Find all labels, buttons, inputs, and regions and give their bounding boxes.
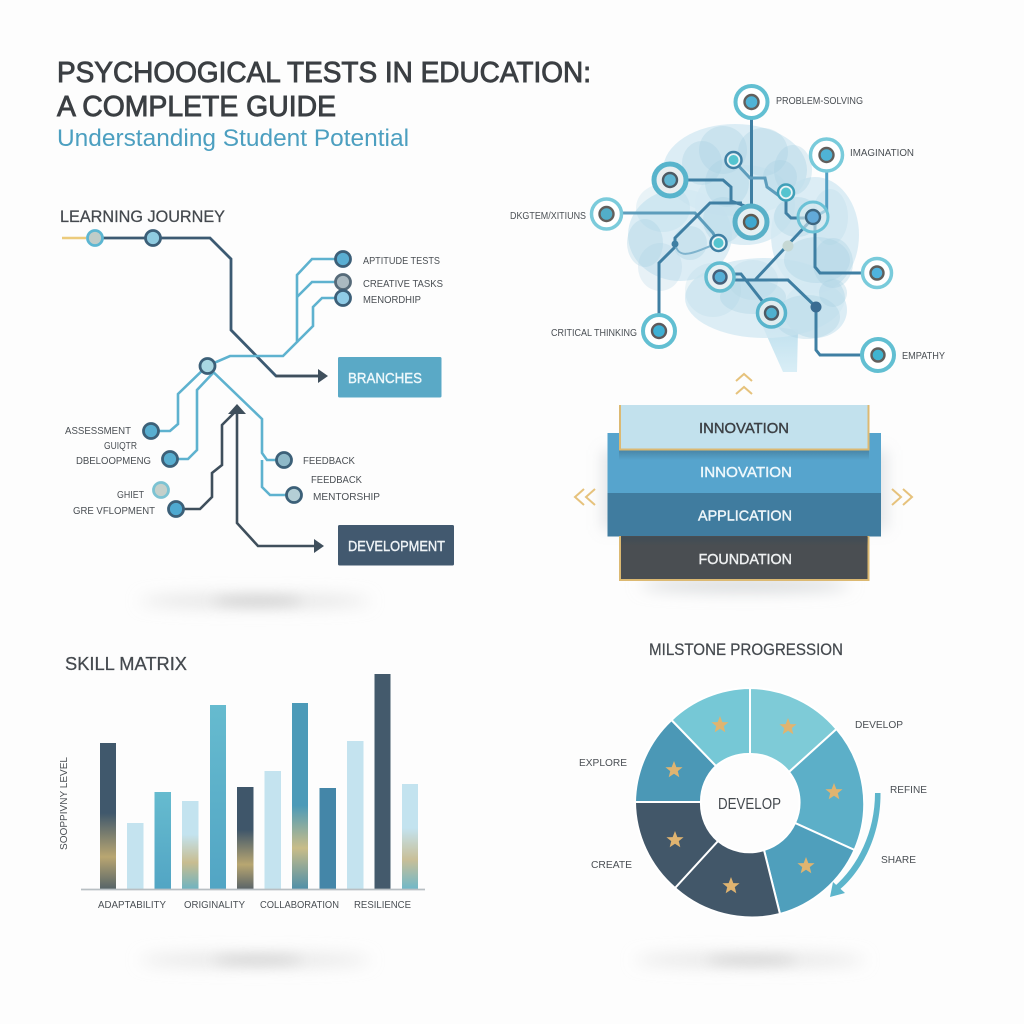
- title line 1: PSYCHOOGICAL TESTS IN EDUCATION:: [57, 57, 591, 89]
- panel: skill matrix: [59, 654, 425, 966]
- layer: innovation top: [620, 405, 868, 450]
- panel: layered pyramid: [575, 374, 912, 591]
- journey labels: GHIET: [117, 489, 144, 501]
- layer: application: [608, 493, 881, 536]
- soft shadow under chart: [140, 954, 370, 966]
- heading: milestone progression: MILSTONE PROGRESSION: [649, 640, 843, 659]
- side shadow: [602, 450, 887, 530]
- center label: DEVELOP: [718, 796, 781, 813]
- journey labels: APTITUDE TESTS: [363, 255, 440, 267]
- brain labels: IMAGINATION: [850, 147, 914, 159]
- chevrons up: [736, 374, 752, 394]
- journey labels: GRE VFLOPMENT: [73, 505, 156, 517]
- x axis labels: COLLABORATION: [260, 899, 339, 911]
- bar chart: [100, 674, 418, 889]
- panel: learning journey: [60, 207, 454, 607]
- panel: milestone progression: [579, 640, 927, 966]
- journey labels: ASSESSMENT: [65, 425, 132, 437]
- layer: innovation blue: [608, 433, 881, 494]
- soft shadow under journey panel: [140, 595, 370, 607]
- box: branches: BRANCHES: [348, 370, 422, 387]
- chevrons left: [575, 489, 595, 505]
- main dark route to branches: [95, 238, 328, 383]
- brain labels: CRITICAL THINKING: [551, 327, 637, 339]
- journey labels: [65, 255, 443, 517]
- blue branch routes upward: [151, 259, 343, 495]
- box: development: [338, 525, 454, 566]
- journey labels: CREATIVE TASKS: [363, 278, 443, 290]
- brain labels: [510, 95, 945, 362]
- wheel labels: DEVELOP: [855, 719, 903, 731]
- journey labels: MENORDHIP: [363, 294, 421, 306]
- journey nodes: [88, 230, 350, 516]
- soft shadow under wheel: [635, 954, 865, 966]
- brain labels: PROBLEM-SOLVING: [776, 95, 863, 107]
- junction dots: [672, 240, 822, 312]
- dark route to development: [176, 404, 324, 553]
- wheel labels: REFINE: [890, 784, 927, 796]
- ring nodes: [592, 86, 894, 371]
- stars: [665, 716, 843, 893]
- heading: learning journey: LEARNING JOURNEY: [60, 207, 225, 226]
- layer: innovation top: INNOVATION: [699, 420, 789, 437]
- title block: [57, 57, 591, 152]
- title line 2: A COMPLETE GUIDE: [57, 91, 336, 123]
- x axis labels: ADAPTABILITY: [98, 899, 166, 911]
- layer: application: APPLICATION: [698, 508, 792, 524]
- subtitle: Understanding Student Potential: [57, 125, 409, 152]
- box: development: DEVELOPMENT: [348, 538, 445, 555]
- chevrons right: [892, 489, 912, 505]
- start line: [62, 237, 86, 239]
- journey labels: DBELOOPMENG: [76, 455, 151, 467]
- layer: foundation: [620, 536, 868, 580]
- journey labels: FEEDBACK: [303, 455, 355, 467]
- journey labels: MENTORSHIP: [313, 491, 380, 503]
- milestone wheel: [635, 688, 864, 917]
- layer: innovation blue: INNOVATION: [700, 464, 792, 481]
- journey labels: FEEDBACK: [311, 474, 362, 486]
- wheel labels: SHARE: [881, 854, 916, 866]
- progress arrow: [830, 793, 881, 897]
- brain labels: DKGTEM/XITIUNS: [510, 210, 586, 222]
- brain silhouette: [627, 124, 859, 372]
- brain labels: EMPATHY: [902, 350, 945, 362]
- x axis labels: ORIGINALITY: [184, 899, 245, 911]
- network lines: [606, 102, 878, 355]
- soft shadow under layers: [640, 579, 850, 591]
- panel: brain network: [510, 86, 945, 372]
- x axis labels: [98, 899, 411, 911]
- heading: skill matrix: SKILL MATRIX: [65, 654, 187, 674]
- y axis label: SOOPPIVNY LEVEL: [59, 757, 70, 850]
- wheel labels: EXPLORE: [579, 757, 627, 769]
- journey labels: GUIQTR: [104, 440, 137, 452]
- chart baseline: [81, 888, 425, 890]
- wheel labels: [579, 719, 927, 871]
- box: branches: [338, 357, 442, 398]
- wheel labels: CREATE: [591, 859, 632, 871]
- x axis labels: RESILIENCE: [354, 899, 411, 911]
- layer: foundation: FOUNDATION: [698, 551, 792, 568]
